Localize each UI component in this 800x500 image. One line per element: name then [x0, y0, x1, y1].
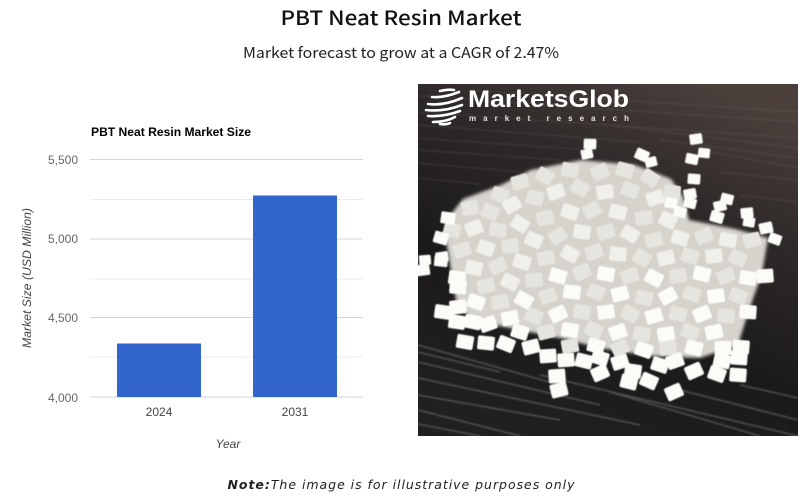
y axis title: Market Size (USD Million) [20, 208, 34, 348]
pellet pile base [445, 160, 768, 358]
y axis labels: 5,500 [48, 153, 78, 167]
y axis labels: 4,000 [48, 391, 78, 405]
logo: MarketsGlob [426, 86, 629, 124]
bar: 2031 [253, 196, 337, 397]
y axis labels: 5,000 [48, 232, 78, 246]
bar chart: market size [20, 125, 363, 451]
bar: 2024 [117, 344, 201, 397]
icon: striped globe [426, 90, 462, 124]
x axis labels [146, 405, 309, 419]
x axis labels: 2031 [282, 405, 309, 419]
logo tagline: market research [469, 114, 629, 123]
subtitle: Market forecast to grow at a CAGR of 2.47% [243, 42, 559, 63]
title: PBT Neat Resin Market [280, 2, 522, 31]
y axis labels: 4,500 [48, 311, 78, 325]
note: Note:The image is for illustrative purposes only [228, 477, 575, 492]
pellets [442, 161, 762, 359]
loose edge pellets [415, 133, 783, 402]
photo: white resin pellets [415, 84, 798, 436]
x axis title: Year [216, 437, 241, 451]
logo wordmark: MarketsGlob [468, 86, 629, 113]
y axis labels [48, 153, 78, 405]
chart title: PBT Neat Resin Market Size [91, 125, 251, 139]
x axis labels: 2024 [146, 405, 173, 419]
